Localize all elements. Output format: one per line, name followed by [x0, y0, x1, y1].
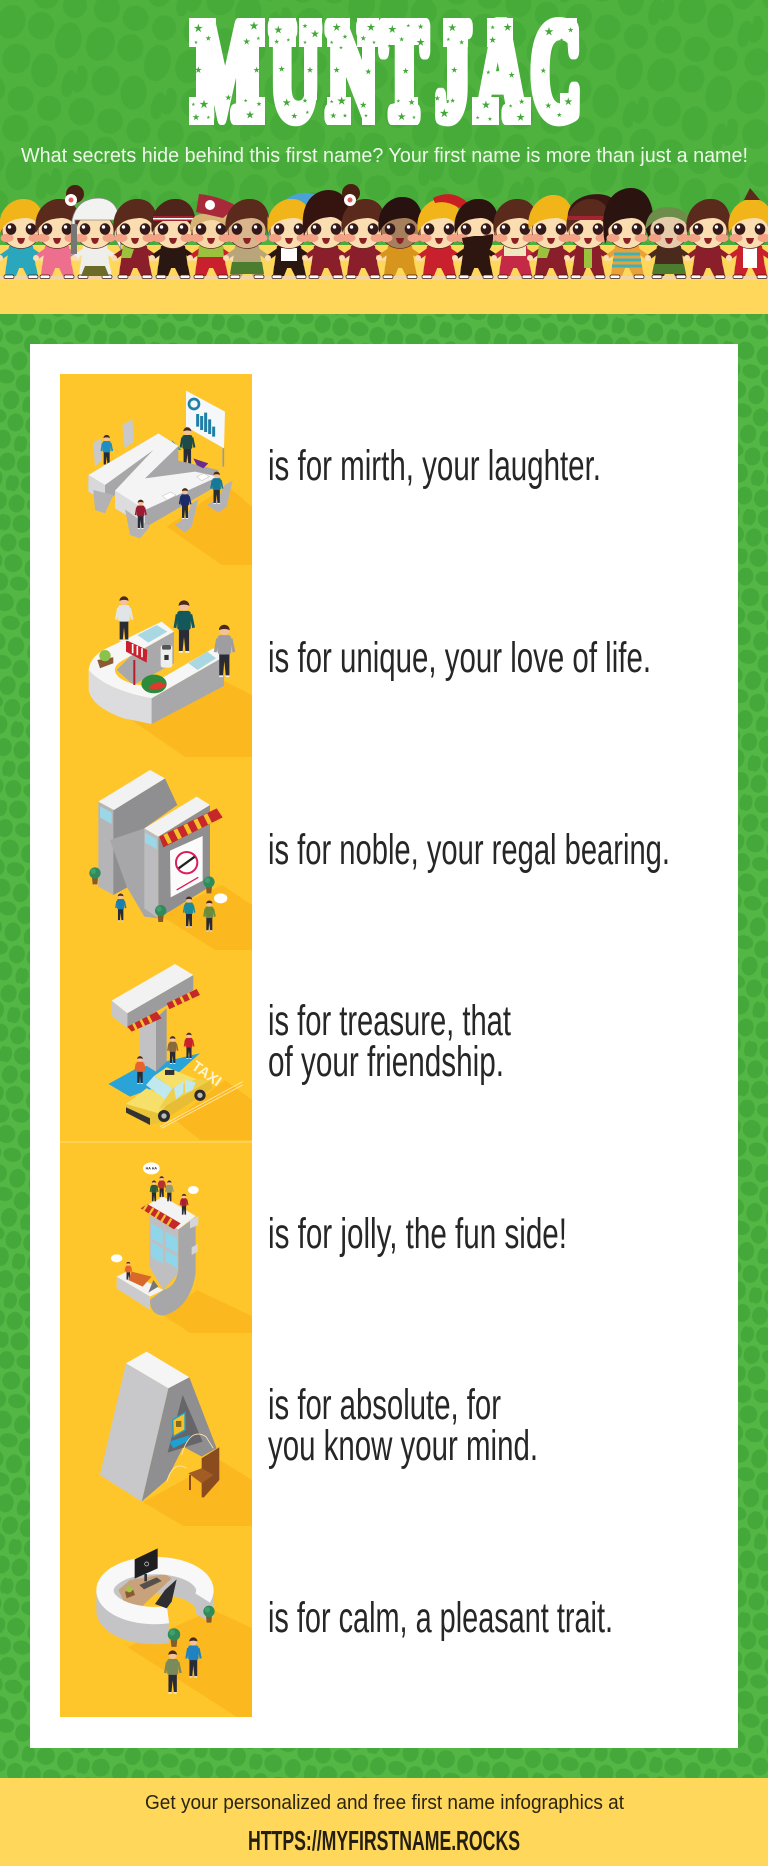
table top: [88, 433, 218, 510]
desk plant: [125, 1586, 135, 1598]
bar: [127, 975, 193, 1028]
counter top: [89, 622, 224, 698]
people on roof: [150, 1176, 188, 1215]
panel: white content card: [30, 344, 738, 1748]
building right face and hook: [150, 1217, 196, 1316]
text: T: of your friendship.: [268, 1038, 504, 1086]
text: A: is for absolute, for: [268, 1381, 501, 1429]
trash bin: [161, 645, 172, 668]
tan desk: [118, 1574, 172, 1607]
text: M: is for mirth, your laughter.: [268, 442, 601, 490]
people: [116, 596, 234, 677]
plants: [168, 1606, 215, 1647]
icon: letter M meeting table: [88, 391, 233, 538]
plants: [89, 867, 215, 922]
title: MUNTJAC star lettering: [189, 0, 581, 147]
top: [141, 1197, 196, 1229]
wire doodles: [167, 1434, 213, 1482]
windows: [100, 806, 157, 849]
ring top: [105, 1566, 205, 1616]
red menu sign: [126, 640, 147, 685]
papers and purple bag: [162, 458, 209, 500]
icon: letter A with chair: [100, 1352, 222, 1502]
desk ring side: [105, 1571, 205, 1636]
lower green band around the panel: [0, 314, 768, 1778]
yellow ground band: [0, 245, 768, 314]
subtitle: What secrets hide behind this first name? Your first name is more than just a name!: [21, 145, 748, 167]
monitor: [135, 1548, 162, 1589]
building faces: [98, 802, 114, 895]
people: [135, 1033, 194, 1084]
title stars: [191, 21, 573, 121]
plant: [97, 650, 113, 668]
people: [116, 894, 215, 931]
footer url: HTTPS://MYFIRSTNAME.ROCKS: [248, 1825, 520, 1856]
speech bubble with laughter: HA HA: [146, 1166, 157, 1170]
footer call to action: Get your personalized and free first name infographics at: [145, 1792, 624, 1814]
table body: [88, 433, 218, 527]
text: J: is for jolly, the fun side!: [268, 1210, 567, 1258]
text: A: you know your mind.: [268, 1422, 538, 1470]
icon: letter C reception desk: [105, 1548, 215, 1694]
wooden chair: [188, 1447, 222, 1497]
laptops: [112, 440, 182, 467]
striped awning: [141, 1204, 181, 1229]
panel: yellow illustration column: [60, 374, 252, 1717]
awnings: [127, 989, 200, 1032]
text: T: [268, 997, 511, 1086]
A left face: [100, 1363, 168, 1502]
seated people: [136, 472, 223, 529]
A top: [126, 1352, 189, 1388]
display windows: [137, 625, 216, 670]
building front: [149, 1215, 178, 1290]
inner triangle: [168, 1395, 203, 1453]
lane lines: [160, 1082, 243, 1128]
stem: [140, 1018, 156, 1072]
small speech bubbles: [111, 1186, 199, 1262]
AC units: [190, 1216, 198, 1255]
base platform: [117, 1277, 150, 1310]
cartoon children parade: [0, 184, 768, 278]
icon: letter T taxi stand: [108, 964, 243, 1128]
striped awning: [159, 808, 223, 847]
icon: letter U food counter: [89, 596, 234, 724]
person: standing presenter: [181, 427, 194, 466]
yellow poster: [173, 1413, 185, 1437]
top faces: [98, 770, 165, 810]
icon: letter N building: [89, 770, 227, 931]
blue mat: [108, 1053, 200, 1097]
taxi: [126, 1067, 213, 1125]
speech bubble: [214, 893, 227, 903]
A right face: [142, 1377, 217, 1502]
person: back left: [101, 435, 112, 466]
speech bubble with laughter: [143, 1162, 160, 1174]
counter side faces: [117, 632, 174, 685]
diagonal shadows: [127, 485, 252, 1717]
people: [165, 1637, 201, 1694]
text: C: is for calm, a pleasant trait.: [268, 1594, 613, 1642]
chairs: [93, 481, 233, 538]
taxi lane text: TAXI: [188, 1058, 224, 1090]
whiteboard: [186, 391, 225, 467]
no smoking sign: [170, 836, 203, 897]
desk and worker: [125, 1262, 158, 1293]
blue laptop: [169, 1435, 190, 1448]
text: A: [268, 1381, 538, 1470]
title block serifs: [189, 18, 577, 125]
windows: [151, 1223, 177, 1268]
chair: [155, 1579, 177, 1608]
icon: letter J building: [111, 1162, 199, 1316]
back chairs: [93, 419, 134, 467]
text: T: is for treasure, that: [268, 997, 511, 1045]
watermelon: [141, 675, 167, 693]
footer: [0, 1778, 768, 1866]
